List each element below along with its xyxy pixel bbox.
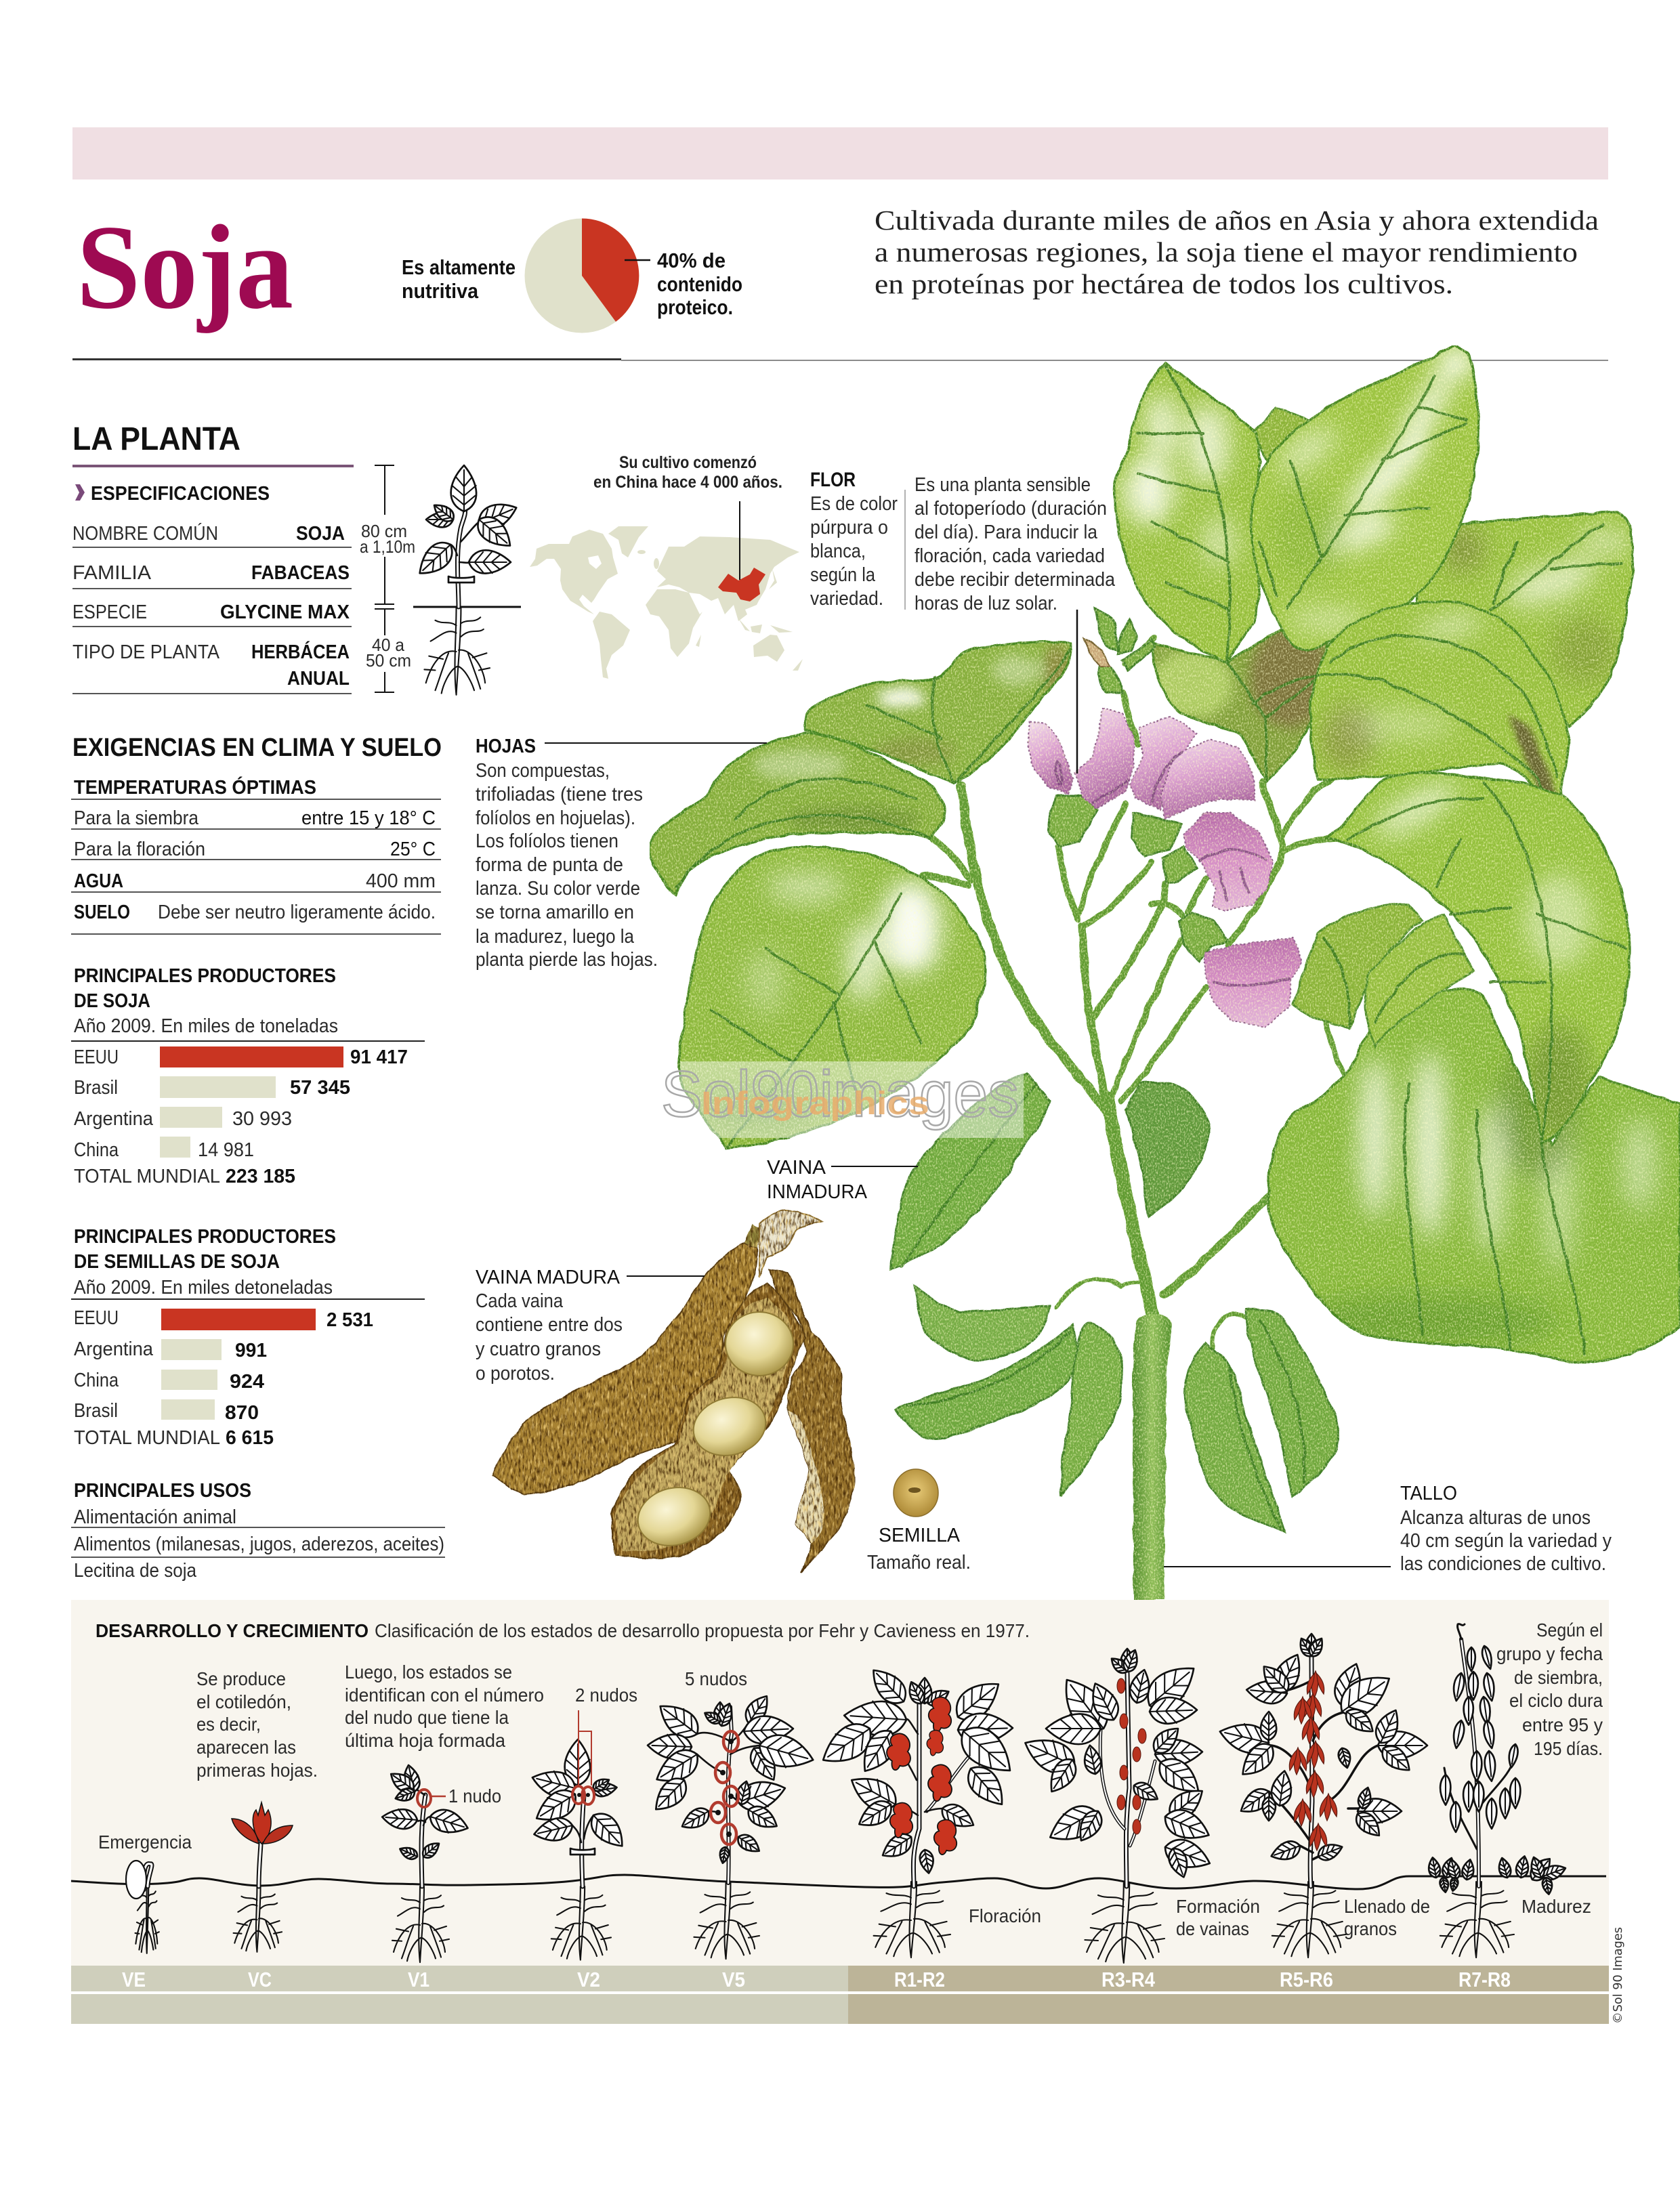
stage: cotiledon: es decir,: [196, 1714, 261, 1735]
stage: v1: identifican con el número: [345, 1685, 544, 1706]
intro paragraph: a numerosas regiones, la soja tiene el mayor rendimiento: [875, 236, 1578, 268]
leaf: left wing: [650, 734, 945, 895]
stage: r7-r8 madurez: [1427, 1620, 1603, 1958]
bar chart: productores de semillas: 991: [235, 1340, 267, 1361]
callout: vaina madura: o porotos.: [476, 1363, 555, 1384]
stage bars: V5: [722, 1968, 745, 1991]
stage: v5: [647, 1668, 817, 1959]
watermark: Infographics: [701, 1086, 929, 1122]
bar chart: productores de semillas: DE SEMILLAS DE SOJA: [74, 1251, 280, 1273]
table: temperaturas: AGUA: [74, 870, 123, 892]
callout: flor: horas de luz solar.: [915, 593, 1057, 614]
copyright: ©Sol 90 Images: [1611, 1927, 1625, 2024]
specifications table: FABACEAS: [251, 562, 350, 584]
callout: flor: blanca,: [810, 541, 866, 562]
bar chart: productores de soja: Año 2009. En miles de toneladas: [74, 1015, 338, 1037]
pie label: 40% de: [657, 249, 726, 272]
bar chart: productores de soja: EEUU: [74, 1046, 119, 1068]
leaf: top centre: [1251, 345, 1479, 650]
specifications table: GLYCINE MAX: [220, 601, 350, 623]
callout: vaina madura: [476, 1267, 705, 1384]
main plant illustration: [650, 345, 1680, 1600]
list: principales usos: [71, 1480, 445, 1582]
bar chart: productores de soja: 14 981: [198, 1139, 254, 1161]
panel heading: Clasificación de los estados de desarrollo propuesta por Fehr y Cavieness en 1977.: [375, 1620, 1030, 1641]
stage: cotiledon: [196, 1668, 318, 1952]
stage: r7-r8 madurez: Según el: [1536, 1620, 1603, 1641]
specifications table: [72, 522, 352, 694]
heading: exigencias: EXIGENCIAS EN CLIMA Y SUELO: [72, 734, 442, 762]
callout: vaina inmadura: VAINA: [767, 1157, 826, 1179]
bar chart: productores de soja: 223 185: [226, 1166, 295, 1187]
callout: hojas: se torna amarillo en: [476, 902, 634, 923]
leaf: large left: [679, 847, 986, 1148]
callout: flor: al fotoperíodo (duración: [915, 498, 1107, 520]
table: temperaturas: Para la floración: [74, 839, 205, 860]
table: temperaturas: entre 15 y 18° C: [301, 807, 436, 829]
specifications table: ESPECIE: [72, 601, 147, 623]
bar chart: productores de semillas: TOTAL MUNDIAL: [74, 1427, 220, 1449]
bar chart: productores de semillas: 2 531: [327, 1309, 373, 1331]
stage: r7-r8 madurez: 195 días.: [1534, 1738, 1603, 1759]
callout: vaina madura: Cada vaina: [476, 1290, 564, 1312]
intro paragraph: Cultivada durante miles de años en Asia y ahora extendida: [875, 205, 1599, 236]
table: temperaturas: Debe ser neutro ligeramente ácido.: [158, 902, 436, 923]
stage: v1: [345, 1662, 544, 1962]
bar chart: productores de soja: PRINCIPALES PRODUCTORES: [74, 965, 336, 987]
callout: tallo: Alcanza alturas de unos: [1400, 1507, 1591, 1529]
table: temperaturas: SUELO: [74, 902, 130, 923]
callout: flor: Es una planta sensible: [915, 474, 1091, 496]
list: principales usos: Lecitina de soja: [74, 1560, 197, 1582]
callout: tallo: las condiciones de cultivo.: [1400, 1553, 1606, 1575]
bar chart: productores de soja: China: [74, 1139, 119, 1161]
plant line drawing: [412, 465, 521, 695]
stage: cotiledon: primeras hojas.: [196, 1760, 318, 1781]
bar chart: productores de semillas: 6 615: [226, 1427, 274, 1449]
pie label: contenido: [657, 272, 742, 296]
bar chart: productores de soja: DE SOJA: [74, 990, 150, 1012]
callout: semilla: SEMILLA: [879, 1525, 961, 1546]
table: temperaturas: [71, 776, 441, 934]
bar chart: productores de semillas: Año 2009. En miles detoneladas: [74, 1277, 333, 1298]
bar chart: productores de soja: 91 417: [350, 1046, 408, 1068]
bar chart: productores de semillas: [71, 1226, 425, 1449]
callout: flor: FLOR: [810, 469, 856, 491]
stage: r7-r8 madurez: el ciclo dura: [1509, 1690, 1603, 1711]
leaf: large right: [1328, 773, 1630, 1145]
stems: [922, 639, 1347, 1600]
callout: hojas: [476, 736, 767, 971]
stage bars: R5-R6: [1280, 1968, 1333, 1991]
intro paragraph: [875, 205, 1599, 299]
callout: semilla: Tamaño real.: [867, 1552, 971, 1573]
callout: hojas: forma de punta de: [476, 854, 623, 876]
stage: r3-r4 formacion de vainas: Formación: [1176, 1896, 1260, 1917]
stage: r1-r2 floracion: [815, 1662, 1041, 1958]
panel: desarrollo y crecimiento: [71, 1600, 1609, 2024]
flowers: [1029, 609, 1302, 1027]
calyces and buds: [1048, 609, 1228, 961]
table: temperaturas: 25° C: [390, 839, 436, 860]
callout: flor: del día). Para inducir la: [915, 522, 1098, 543]
stage: emergencia: Emergencia: [98, 1832, 192, 1853]
china highlight: [718, 568, 765, 601]
height dimension: a 1,10m: [360, 536, 415, 557]
stage: r3-r4 formacion de vainas: [1019, 1648, 1260, 1963]
stage bars: R1-R2: [894, 1968, 945, 1991]
title: Soja: [77, 200, 293, 334]
callout: hojas: Son compuestas,: [476, 760, 610, 782]
stage bars: VE: [122, 1968, 146, 1991]
table: temperaturas: 400 mm: [366, 870, 436, 892]
bar chart: productores de soja: TOTAL MUNDIAL: [74, 1166, 220, 1187]
list: principales usos: Alimentos (milanesas, jugos, aderezos, aceites): [74, 1533, 444, 1555]
height dimension: 80 cm: [361, 521, 407, 541]
callout: flor: [810, 469, 1116, 774]
panel heading: [96, 1620, 1030, 1641]
small leaves behind flower: [1292, 904, 1473, 1046]
leaf: bottom right: [1268, 990, 1680, 1363]
panel heading: DESARROLLO Y CRECIMIENTO: [96, 1620, 369, 1641]
stage: r3-r4 formacion de vainas: de vainas: [1176, 1918, 1249, 1939]
callout: tallo: TALLO: [1400, 1483, 1457, 1504]
list: principales usos: PRINCIPALES USOS: [74, 1480, 251, 1502]
subheading: especificaciones: ESPECIFICACIONES: [91, 483, 270, 505]
callout: tallo: [1164, 1483, 1612, 1575]
bar chart: productores de soja: 30 993: [232, 1108, 292, 1130]
bar chart: productores de semillas: China: [74, 1370, 119, 1391]
callout: flor: debe recibir determinada: [915, 569, 1116, 591]
intro paragraph: en proteínas por hectárea de todos los cultivos.: [875, 268, 1453, 299]
text: cultivation origin: [593, 453, 782, 492]
mature pods: [492, 1211, 854, 1573]
list: principales usos: Alimentación animal: [74, 1506, 236, 1528]
callout: vaina inmadura: [767, 1157, 918, 1203]
table: temperaturas: Para la siembra: [74, 807, 199, 829]
pie label: proteico.: [657, 295, 733, 319]
stage: v2: 2 nudos: [575, 1685, 637, 1706]
stage: r7-r8 madurez: de siembra,: [1514, 1667, 1603, 1688]
stage bars: V1: [408, 1968, 429, 1991]
bar chart: productores de semillas: 870: [225, 1402, 259, 1424]
callout: vaina madura: y cuatro granos: [476, 1338, 601, 1360]
bar chart: productores de semillas: Brasil: [74, 1400, 118, 1422]
height dimension: 50 cm: [366, 650, 411, 671]
text: highly nutritious: nutritiva: [402, 279, 479, 303]
stage: r5-r6 llenado de granos: [1217, 1634, 1430, 1958]
text: cultivation origin: en China hace 4 000 años.: [593, 473, 782, 492]
stage: v2: [529, 1685, 637, 1960]
height dimension: 40 a: [372, 635, 405, 655]
stage: v1: del nudo que tiene la: [345, 1707, 509, 1728]
stage bars: R7-R8: [1458, 1968, 1511, 1991]
specifications table: TIPO DE PLANTA: [72, 641, 220, 663]
callout: hojas: Los folíolos tienen: [476, 830, 618, 852]
bar chart: productores de soja: Argentina: [74, 1108, 154, 1130]
watermark: Sol90images: [661, 1058, 1019, 1130]
world map: [530, 526, 803, 679]
callout: vaina inmadura: INMADURA: [767, 1181, 868, 1203]
stage: emergencia: [98, 1832, 192, 1953]
callout: flor: variedad.: [810, 588, 883, 610]
leaf: curved right: [1253, 602, 1568, 841]
stage: v1: 1 nudo: [448, 1785, 501, 1806]
callout: hojas: HOJAS: [476, 736, 536, 757]
stage: cotiledon: Se produce: [196, 1668, 286, 1689]
stage: r5-r6 llenado de granos: granos: [1344, 1918, 1397, 1939]
callout: vaina madura: VAINA MADURA: [476, 1267, 621, 1288]
stage: r1-r2 floracion: Floración: [969, 1905, 1041, 1926]
callout: flor: floración, cada variedad: [915, 545, 1105, 567]
stage: v5: 5 nudos: [685, 1668, 747, 1689]
stage: r7-r8 madurez: entre 95 y: [1522, 1714, 1603, 1735]
callout: hojas: planta pierde las hojas.: [476, 949, 658, 971]
callout: flor: Es de color: [810, 493, 898, 515]
heading: la planta: LA PLANTA: [72, 421, 240, 457]
stage: r7-r8 madurez: grupo y fecha: [1496, 1643, 1603, 1664]
leaf: under shadow: [1152, 627, 1331, 781]
callout: hojas: folíolos en hojuelas).: [476, 807, 635, 829]
stage: cotiledon: el cotiledón,: [196, 1691, 291, 1712]
soil line: [71, 1875, 1606, 1889]
specifications table: SOJA: [296, 523, 345, 545]
callout: hojas: trifoliadas (tiene tres: [476, 784, 643, 805]
leaf: top left: [1114, 362, 1260, 662]
bar chart: productores de soja: 57 345: [290, 1077, 350, 1099]
bar chart: productores de semillas: PRINCIPALES PRODUCTORES: [74, 1226, 336, 1248]
specifications table: ANUAL: [287, 668, 350, 690]
pie chart: 40% protein: [524, 218, 650, 333]
specifications table: NOMBRE COMÚN: [72, 522, 218, 545]
specifications table: HERBÁCEA: [251, 640, 350, 663]
stage bars: [71, 1966, 1609, 2024]
seeds in pod: [631, 1312, 793, 1554]
top colour band: [72, 127, 1608, 179]
bar chart: productores de soja: Brasil: [74, 1077, 118, 1099]
stage: v1: última hoja formada: [345, 1730, 505, 1751]
stage: v1: Luego, los estados se: [345, 1662, 512, 1683]
pie label: [657, 249, 742, 319]
callout: semilla: [867, 1525, 971, 1573]
immature pods: [891, 1074, 1339, 1532]
stage: cotiledon: aparecen las: [196, 1737, 296, 1758]
bar chart: productores de soja: [71, 965, 425, 1187]
bar chart: productores de semillas: EEUU: [74, 1307, 119, 1329]
leaf: upper right: [1415, 512, 1633, 726]
bar chart: productores de semillas: Argentina: [74, 1338, 154, 1360]
callout: hojas: lanza. Su color verde: [476, 878, 640, 900]
text: highly nutritious: [402, 255, 516, 303]
specifications table: FAMILIA: [72, 562, 152, 584]
callout: tallo: 40 cm según la variedad y: [1400, 1530, 1612, 1552]
small leaf between top leaves: [1253, 408, 1318, 474]
callout: vaina madura: contiene entre dos: [476, 1314, 623, 1336]
callout: flor: púrpura o: [810, 517, 888, 538]
text: cultivation origin: Su cultivo comenzó: [619, 453, 757, 472]
leaf: left upper: [805, 642, 1072, 783]
stage bars: VC: [248, 1968, 272, 1991]
text: highly nutritious: Es altamente: [402, 255, 516, 279]
callout: hojas: la madurez, luego la: [476, 926, 635, 948]
stage: r7-r8 madurez: Madurez: [1521, 1896, 1591, 1917]
table: temperaturas: TEMPERATURAS ÓPTIMAS: [74, 776, 316, 799]
stage: r5-r6 llenado de granos: Llenado de: [1344, 1896, 1430, 1917]
callout: flor: según la: [810, 564, 876, 586]
height dimension: [360, 465, 415, 692]
icon: chevron: [75, 484, 85, 501]
stage bars: V2: [577, 1968, 600, 1991]
petals: [1029, 721, 1074, 795]
stage bars: R3-R4: [1101, 1968, 1156, 1991]
bar chart: productores de semillas: 924: [230, 1371, 264, 1393]
seed: real size: [894, 1469, 938, 1517]
